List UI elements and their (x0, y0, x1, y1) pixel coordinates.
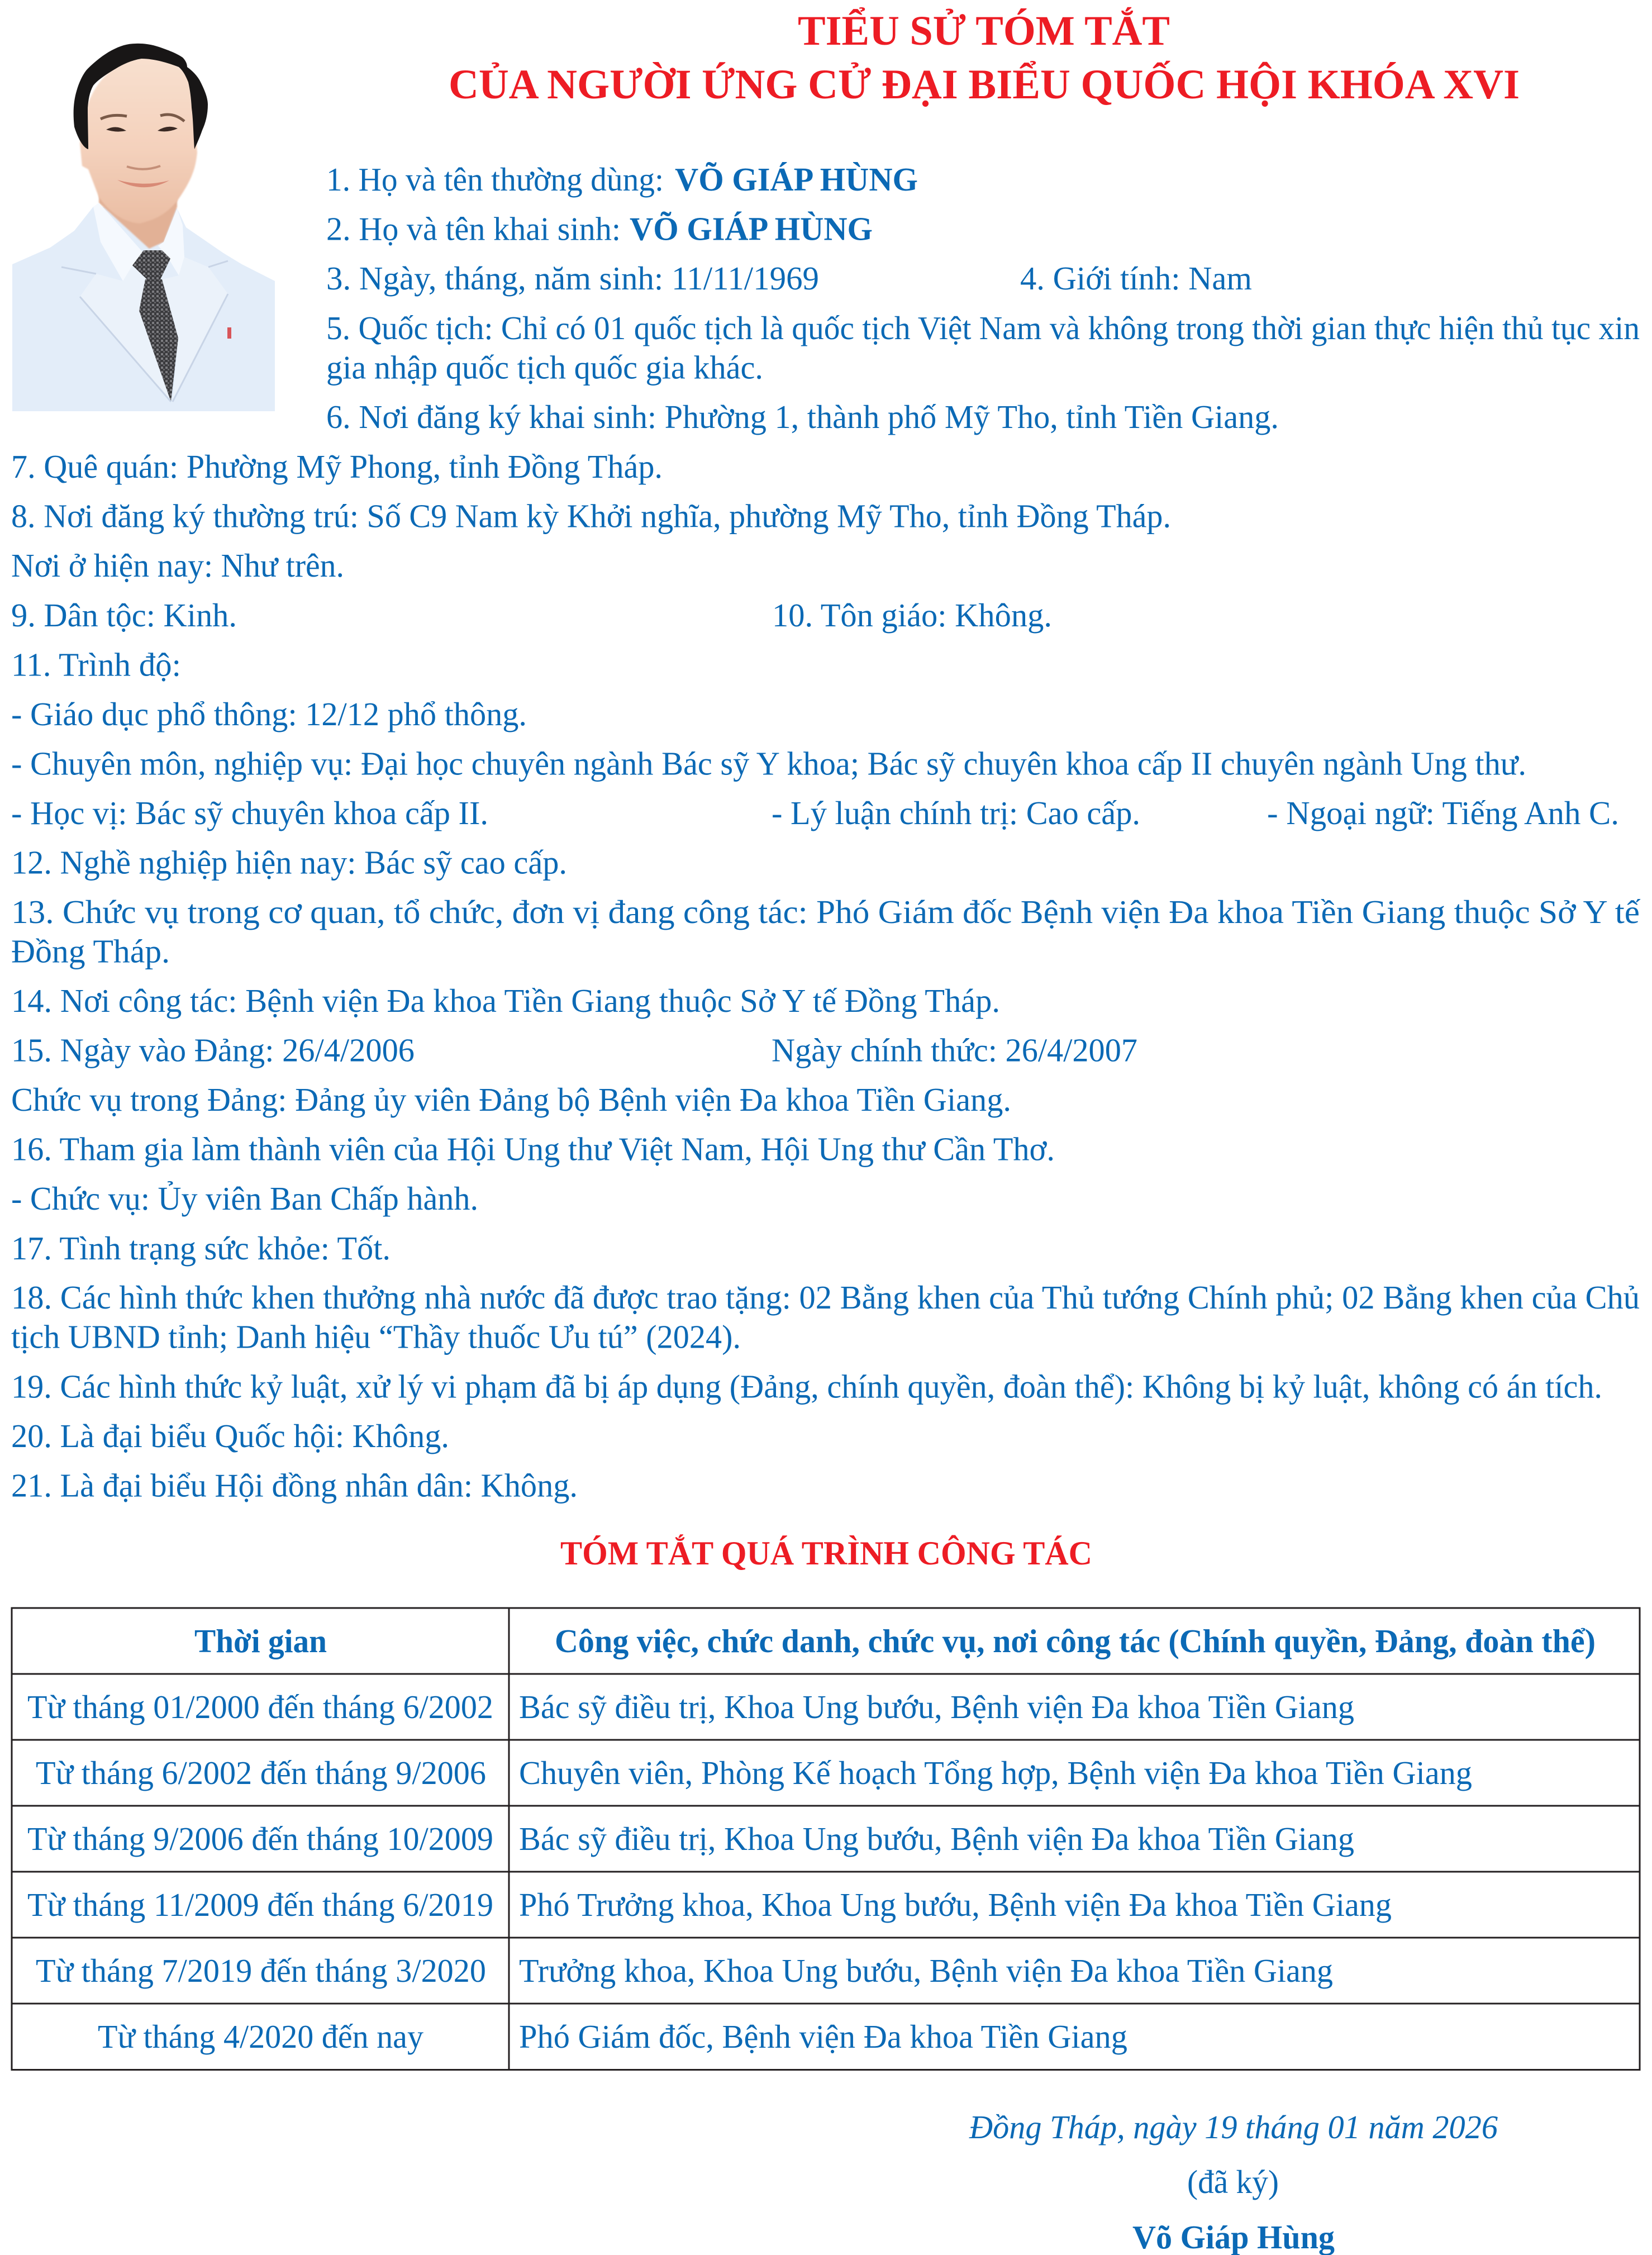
item 11: education: 11. Trình độ: (11, 646, 181, 683)
table: work history (12, 1608, 1640, 2070)
title: TIỂU SỬ TÓM TẮT (798, 8, 1170, 54)
signer name: Võ Giáp Hùng (1132, 2219, 1335, 2255)
item 5: nationality: gia nhập quốc tịch quốc gia khác. (326, 349, 763, 386)
signature block (969, 2109, 1498, 2255)
general education: - Giáo dục phổ thông: 12/12 phổ thông. (11, 696, 527, 732)
item 1: common name (326, 161, 918, 198)
item 6: birth registration: 6. Nơi đăng ký khai sinh: Phường 1, thành phố Mỹ Tho, tỉnh Tiền Giang. (326, 398, 1279, 435)
political theory: - Lý luận chính trị: Cao cấp. (772, 795, 1140, 831)
item 18: awards: 18. Các hình thức khen thưởng nhà nước đã được trao tặng: 02 Bằng khen của Thủ tướng Chính phủ; 02 Bằng khen của Chủ (11, 1279, 1640, 1316)
item 21: People's Council deputy: 21. Là đại biểu Hội đồng nhân dân: Không. (11, 1467, 578, 1504)
specialization: - Chuyên môn, nghiệp vụ: Đại học chuyên ngành Bác sỹ Y khoa; Bác sỹ chuyên khoa cấp II chuyên ngành Ung thư. (11, 745, 1526, 782)
row 4: Phó Trưởng khoa, Khoa Ung bướu, Bệnh viện Đa khoa Tiền Giang (519, 1886, 1392, 1923)
row 5: Trưởng khoa, Khoa Ung bướu, Bệnh viện Đa khoa Tiền Giang (519, 1952, 1333, 1989)
row 1 (27, 1688, 1354, 1725)
photo: portrait of the candidate (12, 44, 275, 411)
row 1: Từ tháng 01/2000 đến tháng 6/2002 (27, 1688, 493, 1725)
row 4 (27, 1886, 1392, 1923)
date and place: Đồng Tháp, ngày 19 tháng 01 năm 2026 (969, 2109, 1498, 2145)
official party date: Ngày chính thức: 26/4/2007 (772, 1031, 1137, 1068)
item 19: discipline: 19. Các hình thức kỷ luật, xử lý vi phạm đã bị áp dụng (Đảng, chính quyền, đoàn thể): Không bị kỷ luật, không có án tích. (11, 1368, 1602, 1405)
item 2: birth name: 2. Họ và tên khai sinh: (326, 211, 621, 248)
item 8: permanent residence: 8. Nơi đăng ký thường trú: Số C9 Nam kỳ Khởi nghĩa, phường Mỹ Tho, tỉnh Đồng Tháp. (11, 498, 1171, 535)
item 16: memberships: 16. Tham gia làm thành viên của Hội Ung thư Việt Nam, Hội Ung thư Cần Thơ. (11, 1131, 1055, 1168)
title: CỦA NGƯỜI ỨNG CỬ ĐẠI BIỂU QUỐC HỘI KHÓA XVI (449, 61, 1520, 108)
membership role: - Chức vụ: Ủy viên Ban Chấp hành. (11, 1180, 478, 1217)
row 6: Từ tháng 4/2020 đến nay (98, 2018, 423, 2055)
row 6 (98, 2018, 1127, 2055)
party position: Chức vụ trong Đảng: Đảng ủy viên Đảng bộ Bệnh viện Đa khoa Tiền Giang. (11, 1081, 1011, 1118)
item 13: current position (11, 893, 1641, 970)
row 5 (36, 1952, 1333, 1989)
academic degree: - Học vị: Bác sỹ chuyên khoa cấp II. (11, 795, 488, 831)
table header: work: Công việc, chức danh, chức vụ, nơi công tác (Chính quyền, Đảng, đoàn thể) (555, 1623, 1596, 1659)
item 13: current position: Đồng Tháp. (11, 933, 170, 970)
item 13: current position: 13. Chức vụ trong cơ quan, tổ chức, đơn vị đang công tác: Phó Giám đốc Bệnh viện Đa khoa Tiền Giang thuộc Sở Y tế (11, 893, 1641, 930)
item 4: gender: 4. Giới tính: Nam (1020, 260, 1252, 297)
item 9: ethnicity: 9. Dân tộc: Kinh. (11, 597, 237, 634)
item 7: hometown: 7. Quê quán: Phường Mỹ Phong, tỉnh Đồng Tháp. (11, 448, 663, 485)
row 1: Bác sỹ điều trị, Khoa Ung bướu, Bệnh viện Đa khoa Tiền Giang (519, 1688, 1354, 1725)
row 3: Bác sỹ điều trị, Khoa Ung bướu, Bệnh viện Đa khoa Tiền Giang (519, 1820, 1354, 1857)
item 5: nationality (326, 310, 1640, 386)
row 2: Từ tháng 6/2002 đến tháng 9/2006 (36, 1754, 486, 1791)
row 6: Phó Giám đốc, Bệnh viện Đa khoa Tiền Giang (519, 2018, 1127, 2055)
row 3: Từ tháng 9/2006 đến tháng 10/2009 (27, 1820, 493, 1857)
item 3: date of birth: 3. Ngày, tháng, năm sinh: 11/11/1969 (326, 260, 819, 297)
table header: time: Thời gian (194, 1623, 327, 1659)
item 1: common name: VÕ GIÁP HÙNG (675, 161, 918, 198)
item 18: awards (11, 1279, 1640, 1355)
item 18: awards: tịch UBND tỉnh; Danh hiệu “Thầy thuốc Ưu tú” (2024). (11, 1319, 741, 1355)
section heading: work history: TÓM TẮT QUÁ TRÌNH CÔNG TÁC (560, 1535, 1092, 1572)
title (449, 8, 1520, 108)
personal details text block (11, 161, 1641, 1504)
foreign language: - Ngoại ngữ: Tiếng Anh C. (1267, 795, 1619, 831)
item 2: birth name: VÕ GIÁP HÙNG (630, 211, 873, 248)
item 2: birth name (326, 211, 873, 248)
row 5: Từ tháng 7/2019 đến tháng 3/2020 (36, 1952, 486, 1989)
row 4: Từ tháng 11/2009 đến tháng 6/2019 (27, 1886, 493, 1923)
row 2 (36, 1754, 1472, 1791)
item 20: National Assembly deputy: 20. Là đại biểu Quốc hội: Không. (11, 1417, 449, 1454)
item 10: religion: 10. Tôn giáo: Không. (772, 597, 1052, 634)
current residence: Nơi ở hiện nay: Như trên. (11, 547, 344, 584)
table grid (12, 1608, 1640, 2070)
item 17: health status: 17. Tình trạng sức khỏe: Tốt. (11, 1230, 391, 1267)
row 3 (27, 1820, 1354, 1857)
item 5: nationality: 5. Quốc tịch: Chỉ có 01 quốc tịch là quốc tịch Việt Nam và không trong thời gian thực hiện thủ tục xin (326, 310, 1640, 346)
item 1: common name: 1. Họ và tên thường dùng: (326, 161, 664, 198)
row 2: Chuyên viên, Phòng Kế hoạch Tổng hợp, Bệnh viện Đa khoa Tiền Giang (519, 1754, 1472, 1791)
signed note: (đã ký) (1187, 2163, 1279, 2200)
item 12: occupation: 12. Nghề nghiệp hiện nay: Bác sỹ cao cấp. (11, 844, 567, 881)
item 14: workplace: 14. Nơi công tác: Bệnh viện Đa khoa Tiền Giang thuộc Sở Y tế Đồng Tháp. (11, 982, 1000, 1019)
item 15: party admission date: 15. Ngày vào Đảng: 26/4/2006 (11, 1031, 415, 1068)
